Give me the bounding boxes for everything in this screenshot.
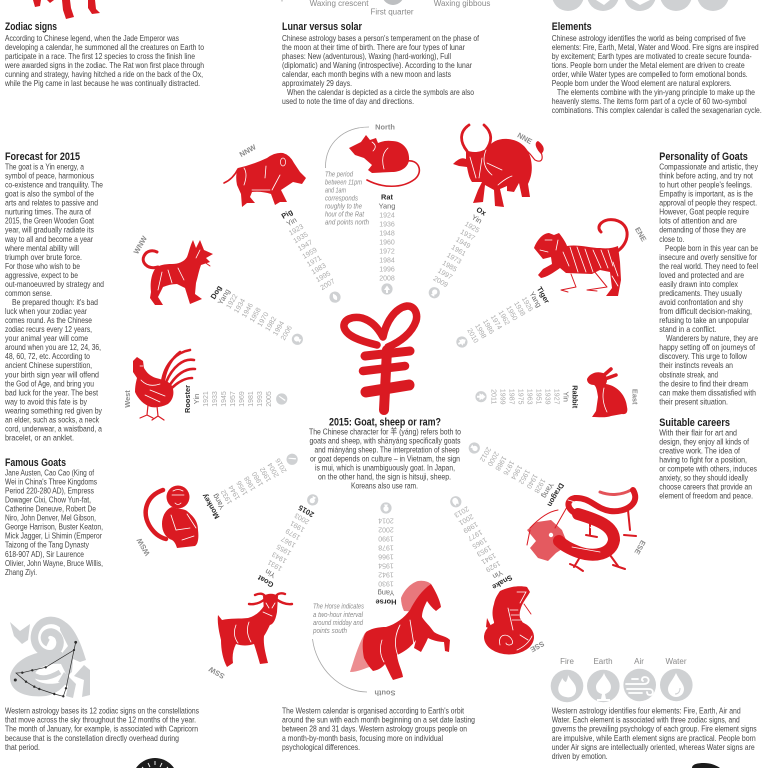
arc and note: Rat hour: The period	[325, 170, 354, 178]
text block: Forecast for 2015: year, will gradually radiate its	[5, 225, 94, 235]
year column: Pig: 1935	[293, 231, 310, 245]
year column: Dog: 2006	[280, 325, 294, 342]
arc and note: Rat hour	[325, 127, 369, 226]
arc and note: Rat hour: and 1am	[325, 186, 346, 194]
text block: Western calendar: a month-by-month basis, focusing more on individual	[282, 733, 443, 743]
year column: Pig: 1923	[288, 223, 305, 237]
year column: Ox: 1961	[450, 244, 467, 258]
text block: Lunar versus solar: (diplomatic) and Waning (introspective). According to the lunar	[282, 60, 472, 70]
year column: Tiger: 1962	[497, 310, 510, 327]
year column: Tiger: 1950	[504, 305, 518, 322]
text block: Forecast for 2015: bad luck for the year. The best	[5, 387, 98, 397]
text block: Forecast for 2015: around when you are 12, 24, 36,	[5, 342, 101, 352]
text block: Forecast for 2015: cord, underwear, a waistband, a	[5, 423, 102, 433]
year column: Rooster: 1969	[239, 391, 246, 407]
text block: Personality of Goats: obstinate streak, and	[659, 369, 718, 379]
year column: Rooster: 2005	[266, 391, 273, 407]
year column: Snake	[444, 491, 514, 592]
text block: Western calendar: between 28 and 31 days. Western astrology groups people on	[282, 724, 467, 734]
text block: Forecast for 2015: goat is also the symbol of the	[5, 189, 94, 199]
year column: Ox	[425, 204, 490, 302]
text block: Forecast for 2015: symbol of peace, harmonious	[5, 170, 94, 180]
animal: Monkey	[146, 486, 198, 548]
arc and note: Horse hour	[312, 602, 367, 692]
year column: Ox: Ox	[475, 205, 489, 218]
text block: Forecast for 2015: 48, 60, 72, etc. According to	[5, 351, 90, 361]
arc and note: Horse hour: The Horse indicates	[313, 602, 364, 611]
text block: Forecast for 2015: bracelet, or an anklet.	[5, 432, 74, 442]
text block: Western calendar: psychological differences.	[282, 742, 360, 752]
year column: Pig: 1983	[311, 262, 328, 276]
text block: Zodiac signs	[4, 21, 204, 88]
animal: Ox	[453, 125, 544, 207]
text block: Western calendar: around the sun with each month beginning on a set date lasting	[282, 715, 475, 725]
text block: Zodiac signs: while the Pig came in last because he was continually distracted.	[4, 78, 200, 88]
year column: Goat	[256, 491, 323, 589]
year column: Monkey: 1992	[259, 466, 273, 483]
text block: Famous Goats: 618-907 AD), Sir Laurence	[5, 549, 84, 559]
animal: Pig	[224, 153, 306, 207]
text block: Western astrology constellations: because that is the constellation directly overhead during	[5, 733, 179, 743]
text block: 2015 Goat, sheep or ram?: or goat depends on culture – in Vietnam, the sign	[310, 454, 460, 464]
text block: Forecast for 2015: For those who wish to be	[5, 261, 80, 271]
year column: Dog: 1994	[272, 320, 286, 337]
year column: Goat: 1979	[285, 527, 302, 541]
text block: Lunar versus solar	[282, 21, 479, 106]
text block: Personality of Goats: their instincts reveals an	[659, 360, 733, 370]
animal: Rooster	[133, 350, 195, 420]
compass labels: ESE	[632, 539, 648, 556]
text block: Famous Goats: Niro, John Denver, Mel Gibson,	[5, 513, 96, 523]
year column: Horse: 1966	[378, 552, 394, 560]
moon phase strip	[282, 0, 490, 16]
text block: Forecast for 2015: Be prepared though: it's bad	[12, 297, 98, 307]
year column: Monkey	[199, 444, 304, 520]
year column: Tiger: Yang	[527, 290, 544, 309]
text block: Forecast for 2015: The goat is a Yin energy, a	[5, 162, 84, 172]
text block: Famous Goats: Famous Goats	[5, 457, 66, 469]
text block: Famous Goats: Taizong of the Tang Dynasty	[5, 540, 90, 550]
year column: Rooster: 1993	[257, 391, 264, 407]
text block: Famous Goats: Olivier, John Wayne, Bruce Willis,	[5, 558, 103, 568]
compass labels: NNW	[238, 142, 258, 159]
year column: Pig: 1959	[302, 247, 319, 261]
icons: five Chinese elements, cropped	[552, 0, 729, 11]
year column: Pig: Pig	[280, 207, 295, 221]
year column: Snake: 1941	[480, 551, 497, 565]
arc and note: Horse hour: points south	[312, 626, 347, 635]
year column: Rooster: 1957	[230, 391, 237, 407]
text block: Western astrology constellations	[5, 706, 199, 752]
year column: Tiger: 1986	[481, 319, 495, 336]
year column: Horse: 1930	[378, 580, 394, 586]
text block: Famous Goats: Jane Austen, Cao Cao (King of	[5, 468, 94, 478]
compass labels: NNE	[516, 131, 534, 146]
text block: Forecast for 2015: the God of Age, and bring you	[5, 378, 94, 388]
text block: Forecast for 2015: co-existence and tranquility. The	[5, 180, 103, 190]
year column: Dragon: 1964	[509, 464, 523, 481]
text block: Lunar versus solar: When the calendar is depicted as a circle the symbols are also	[287, 87, 474, 97]
text block: Forecast for 2015: where mental ability will	[4, 243, 79, 253]
year column: Horse: 2014	[378, 516, 394, 524]
text block: 2015 Goat, sheep or ram?: Koreans also use ram.	[351, 481, 418, 491]
icons: Western elements: Earth	[593, 657, 613, 666]
text block: Suitable careers	[659, 417, 757, 501]
animal: Horse	[350, 581, 450, 680]
year column: Ox: 1985	[441, 260, 458, 274]
year column: Dog: 1970	[257, 311, 271, 328]
text block: Suitable careers: With their flair for art and	[659, 427, 737, 437]
year column: Horse	[376, 502, 396, 606]
animal: Goat	[218, 593, 292, 667]
year column: Pig: Yin	[285, 215, 298, 228]
year column: Tiger: 1938	[512, 301, 526, 318]
text block: Western astrology constellations: Western astrology bases its 12 zodiac signs on the constellations	[5, 706, 199, 716]
text block: Forecast for 2015: way to avoid this fate is by	[4, 396, 88, 406]
compass labels: East	[630, 389, 640, 405]
text block: Western elements	[552, 706, 757, 761]
text block: Western calendar	[282, 706, 475, 752]
year column: Tiger	[453, 285, 552, 353]
year column: Monkey: 1944	[228, 484, 242, 501]
text block: 2015 Goat, sheep or ram?: 2015: Goat, sheep or ram?	[329, 416, 441, 428]
year column: Snake: 2001	[457, 512, 474, 526]
text block: 2015 Goat, sheep or ram?	[309, 416, 461, 491]
year column: Goat: Goat	[256, 573, 275, 589]
year column: Goat: Yin	[263, 567, 277, 580]
text block: Forecast for 2015: comes round. As the Chinese	[5, 315, 92, 325]
text block: Suitable careers: Suitable careers	[659, 417, 730, 429]
year column: Dragon: 1928	[532, 477, 546, 494]
text block: Suitable careers: creative work. The idea of	[659, 446, 740, 456]
year column: Snake: 1953	[475, 543, 492, 557]
text block: Lunar versus solar: the moon at their time of birth. There are four types of lunar	[282, 42, 465, 52]
illustration: Capricorn with constellation	[10, 620, 90, 698]
text block: Forecast for 2015: out-manoeuvred by strategy and	[5, 279, 104, 289]
year column: Tiger: 1998	[473, 323, 487, 340]
year column: Goat: 2015	[297, 503, 316, 519]
text block: Elements: Elements	[552, 21, 592, 33]
text block: Western astrology constellations: The month of January, for example, is associated with Capricorn	[5, 724, 198, 734]
text block: Famous Goats: Period 220-280 AD), Empress	[5, 486, 94, 496]
arc and note: Horse hour: around midday and	[313, 618, 364, 627]
year column: Monkey: 2016	[275, 457, 289, 474]
year column: Rat: 1948	[379, 230, 395, 238]
text block: Personality of Goats: close to.	[659, 234, 684, 244]
text block: Zodiac signs: developing a calendar, he summoned all the creatures on Earth to	[5, 42, 204, 52]
arc and note: Horse hour: a two-hour interval	[313, 610, 363, 619]
text block: Lunar versus solar: approximately 29 days.	[282, 78, 352, 88]
year column: Rooster: 1981	[248, 391, 255, 407]
text block: Forecast for 2015: nurturing times. The aura of	[5, 207, 91, 217]
year column: Ox: 1949	[454, 236, 471, 250]
year column: Snake: Yin	[491, 568, 505, 581]
icon: black sun sign, cropped at bottom	[132, 758, 178, 768]
year column: Rabbit: 1927	[552, 389, 560, 405]
year column: Rabbit: Rabbit	[570, 385, 580, 409]
compass labels: South	[374, 688, 395, 698]
year column: Dragon: Yang	[540, 481, 556, 500]
year column: Rabbit: 1987	[508, 389, 514, 405]
text block: Forecast for 2015	[4, 151, 104, 442]
year column: Goat: 1955	[276, 542, 293, 556]
year column: Rat: 1936	[379, 222, 395, 228]
animal: Tiger	[534, 220, 627, 296]
year column: Goat: 1943	[271, 550, 288, 564]
arc and note: Rat hour: roughly to the	[325, 202, 362, 210]
year column: Pig: 2007	[320, 278, 337, 292]
year column: Dragon: 1976	[501, 459, 515, 476]
year column: Dog: 1982	[265, 316, 278, 333]
year column: Goat: 1931	[267, 558, 284, 572]
text block: Lunar versus solar: phases: New (adventurous), Waxing (hard-working), Full	[282, 51, 451, 61]
year column: Snake: Snake	[491, 573, 514, 592]
year column: Rabbit: Yin	[562, 391, 570, 402]
text block: Famous Goats: Zhang Ziyi.	[5, 567, 37, 577]
text block: Forecast for 2015: ancient Chinese superstition,	[5, 360, 92, 370]
text block: Personality of Goats: Personality of Goats	[659, 151, 748, 163]
year column: Dog: 1958	[249, 307, 263, 324]
year column: Rabbit	[475, 385, 580, 409]
year column: Tiger: 1926	[520, 296, 534, 313]
year column: Pig: 1947	[297, 239, 314, 253]
year column: Monkey: 2004	[267, 461, 281, 478]
year column: Tiger: 1974	[489, 314, 503, 331]
text block: Personality of Goats: avoid confrontation and shy	[659, 297, 744, 307]
text block: Zodiac signs: cunning and strategy, having hitched a ride on the back of the Ox,	[5, 69, 203, 79]
animal: Rabbit	[587, 369, 627, 417]
text block: 2015 Goat, sheep or ram?: on the other hand, the sign is hitsuji, sheep.	[318, 472, 451, 482]
year column: Goat: 1991	[289, 519, 306, 533]
animal: Snake	[484, 586, 534, 654]
text block: Famous Goats: Catherine Deneuve, Robert De	[5, 504, 96, 514]
year column: Ox: 1997	[436, 268, 453, 281]
year column: Dog: 1934	[233, 298, 247, 315]
text block: Forecast for 2015: an elder, such as socks, a neck	[5, 414, 100, 424]
compass labels: SSW	[207, 665, 226, 681]
text block: Forecast for 2015: arts and relates to passive and	[5, 198, 98, 208]
text block: Forecast for 2015: wearing something red given by	[4, 405, 103, 415]
year column: Horse: Yang	[378, 588, 394, 598]
year column: Horse: 1954	[378, 562, 394, 568]
year column: Rat	[379, 192, 395, 295]
icon: black figure, cropped at bottom	[692, 763, 720, 768]
year column: Dragon: 2000	[486, 450, 499, 467]
year column: Goat: 2003	[294, 511, 311, 525]
year column: Tiger: Tiger	[535, 285, 552, 305]
year column: Rat: Yang	[379, 202, 395, 210]
year column: Rat: 1996	[379, 266, 395, 274]
year column: Snake: 1929	[484, 559, 501, 573]
text block: Personality of Goats: demanding of those they are	[659, 225, 746, 235]
year column: Rat: 1972	[379, 248, 395, 256]
text block: Personality of Goats: lots of attention and are	[659, 216, 737, 226]
text block: Suitable careers: having to fight for a position,	[659, 454, 747, 464]
year column: Dragon: 1952	[517, 468, 531, 485]
text block: 2015 Goat, sheep or ram?: is mui, which is unambiguously goat. In Japan,	[315, 462, 455, 472]
arc and note: Rat hour: corresponds	[325, 194, 358, 202]
text block: Zodiac signs: Zodiac signs	[5, 21, 57, 33]
text block: Western astrology constellations: that period.	[5, 742, 40, 752]
year column: Snake: 2013	[453, 504, 470, 518]
arc and note: Rat hour: hour of the Rat	[325, 210, 365, 218]
text block: Lunar versus solar: Chinese astrology bases a person's temperament on the phase of	[282, 33, 479, 43]
year column: Snake: 1965	[471, 536, 488, 549]
year column: Rat: 1960	[379, 240, 395, 246]
year column: Rat: 1924	[379, 212, 395, 220]
text block: Personality of Goats: their present situation.	[659, 396, 728, 406]
year column: Rabbit: 1951	[534, 389, 542, 405]
text block: Western elements: driven by emotion.	[552, 751, 608, 761]
text block: Personality of Goats: easily drawn into complex	[659, 279, 739, 289]
compass labels: ENE	[633, 225, 648, 243]
year column: Ox: 1937	[459, 229, 476, 243]
year column: Rat: 2008	[379, 276, 395, 282]
compass labels: WNW	[132, 234, 149, 256]
text block: Forecast for 2015: luck when your zodiac year	[5, 306, 87, 316]
year column: Ox: 1925	[463, 221, 480, 235]
year column: Dog: 1922	[226, 293, 239, 310]
text block: Lunar versus solar: calendar, each month begins with a new moon and lasts	[282, 69, 451, 79]
text block: Personality of Goats: the desire to find their dream	[659, 378, 748, 388]
year column: Pig: 1971	[306, 255, 323, 269]
text block: Famous Goats: George Harrison, Buster Keaton,	[5, 522, 103, 532]
year column: Pig	[278, 206, 345, 306]
text block: Zodiac signs: According to Chinese legend, when the Jade Emperor was	[5, 33, 179, 43]
text block: Forecast for 2015: aggressive, expect to be	[5, 270, 78, 280]
year column: Ox: Yin	[470, 213, 484, 226]
text block: Personality of Goats	[659, 151, 759, 406]
year column: Tiger: 2010	[465, 328, 479, 345]
year column: Horse: 1990	[378, 534, 394, 542]
compass labels: West	[123, 390, 132, 408]
text block: 2015 Goat, sheep or ram?: The Chinese character for 羊 (yáng) refers both to	[309, 425, 461, 436]
icons: Western elements: Water	[665, 657, 687, 666]
year column: Rooster: Rooster	[183, 385, 192, 413]
year column: Monkey: Yang	[210, 492, 227, 511]
year column: Rooster: 1945	[221, 391, 228, 407]
year column: Rabbit: 1999	[498, 389, 506, 405]
year column: Rabbit: 2011	[490, 389, 496, 404]
year column: Rooster: 1921	[203, 391, 210, 407]
text block: Famous Goats	[5, 457, 103, 577]
year column: Rooster: 1933	[212, 391, 219, 407]
year column: Dog: 1946	[241, 302, 255, 319]
text block: Famous Goats: Dowager Cixi, Chow Yun-fat,	[5, 495, 91, 505]
text block: Lunar versus solar: used to note the time of day and directions.	[282, 96, 414, 106]
year column: Snake: 1989	[462, 520, 479, 534]
text block: Forecast for 2015: Forecast for 2015	[5, 151, 80, 163]
year column: Dog	[208, 283, 306, 349]
text block: Zodiac signs: were awarded signs in the zodiac. The Rat won first place through	[4, 60, 204, 70]
illustration: cropped animal legs at top	[33, 0, 100, 19]
text block: Elements	[552, 21, 762, 115]
compass labels: WSW	[135, 537, 152, 557]
year column: Horse: Horse	[376, 598, 396, 606]
animal: Dragon	[527, 490, 636, 571]
text block: Forecast for 2015: triumph over brute force.	[5, 252, 82, 262]
text block: 2015 Goat, sheep or ram?: goats and sheep, with shānyáng specifically goats	[310, 435, 460, 445]
text block: Forecast for 2015: your animal year will come	[5, 333, 88, 343]
year column: Dragon: Dragon	[545, 482, 566, 509]
year column: Goat: 1967	[280, 534, 297, 548]
moon phase strip: First quarter	[370, 8, 414, 16]
animal: Rat	[349, 135, 419, 186]
goat character 羊 brush calligraphy	[344, 306, 417, 410]
text block: Personality of Goats: loved and protected and are	[659, 270, 744, 280]
text block: Personality of Goats: predicaments. They usually	[659, 288, 743, 298]
compass labels	[123, 122, 648, 698]
text block: Forecast for 2015: your birth sign year will offend	[5, 369, 99, 379]
year column: Rat: Rat	[381, 192, 393, 202]
compass labels: SSE	[529, 639, 546, 654]
year column: Monkey: 1956	[236, 479, 250, 496]
year column: Snake: 1977	[466, 528, 483, 542]
year column: Monkey: 1968	[244, 475, 257, 492]
year column: Dragon: 1940	[524, 473, 538, 490]
year column: Rat: 1984	[379, 258, 395, 264]
year column: Monkey: 1980	[251, 470, 265, 487]
text block: Lunar versus solar: Lunar versus solar	[282, 21, 362, 33]
text block: Personality of Goats: stand in a conflict.	[659, 324, 716, 334]
year column: Horse: 1978	[378, 544, 394, 550]
text block: Famous Goats: Wei in China's Three Kingdoms	[5, 476, 97, 486]
year column: Dog: Dog	[209, 283, 224, 301]
year column: Horse: 2002	[378, 526, 394, 532]
year column: Dragon	[463, 434, 566, 509]
text block: Personality of Goats: discovery. This urge to follow	[659, 351, 748, 361]
icons: Western elements: Fire	[560, 657, 574, 666]
year column: Dragon: 2012	[478, 446, 492, 463]
icons: Western elements: Air	[634, 657, 644, 666]
text block: Personality of Goats: refusing to take an unpopular	[659, 315, 749, 325]
year column: Monkey: Monkey	[199, 491, 221, 520]
year column: Dog: Yang	[216, 287, 232, 306]
year column: Rabbit: 1963	[526, 389, 532, 405]
text block: Famous Goats: Mick Jagger, Li Shimin (Emperor	[5, 531, 102, 541]
text block: Western astrology constellations: that move across the sky throughout the 12 months of the year.	[5, 715, 196, 725]
year column: Ox: 1973	[445, 252, 462, 266]
icons: Western elements	[551, 657, 693, 702]
text block: Zodiac signs: participate in a race. The first 12 species to cross the finish line	[5, 51, 195, 61]
text block: Forecast for 2015: zodiac recurs every 12 years,	[5, 324, 92, 334]
text block: Forecast for 2015: common sense.	[5, 288, 52, 298]
compass labels: North	[375, 122, 395, 132]
text block: 2015 Goat, sheep or ram?: and miányáng sheep. The interpretation of sheep	[314, 444, 460, 454]
text block: Western calendar: The Western calendar is organised according to Earth's orbit	[282, 706, 464, 716]
animal: Dog	[143, 240, 213, 305]
year column: Ox: 2009	[432, 275, 449, 289]
text block: Forecast for 2015: way to all and become a year	[4, 234, 93, 244]
year column: Horse: 1942	[378, 570, 394, 578]
year column: Dragon: 1988	[493, 455, 507, 472]
arc and note: Rat hour: and points north	[325, 218, 369, 226]
year column: Rooster	[183, 385, 287, 413]
arc and note: Rat hour: between 11pm	[325, 178, 362, 186]
year column: Rabbit: 1939	[544, 389, 550, 405]
year column: Rabbit: 1975	[516, 389, 524, 405]
text block: Forecast for 2015: 2015, the Green Wooden Goat	[5, 216, 94, 226]
year column: Pig: 1995	[315, 270, 332, 284]
year column: Rooster: Yin	[192, 394, 201, 404]
year column: Monkey: 1932	[220, 488, 234, 505]
